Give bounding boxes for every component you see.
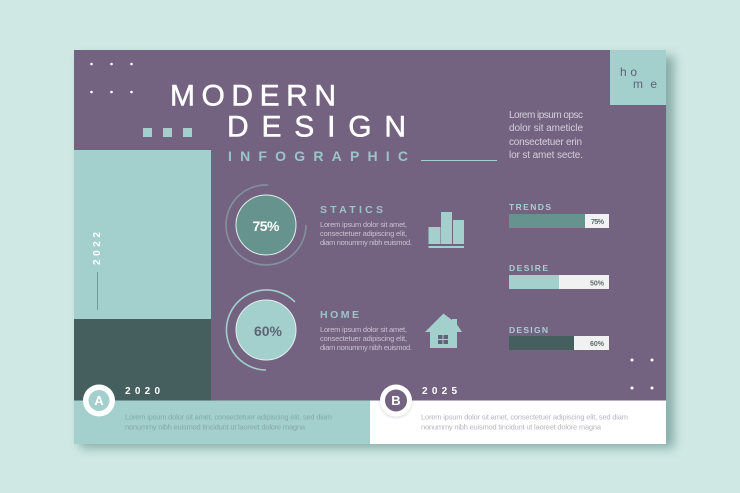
body: home: Lorem ipsum dolor sit amet, bbox=[320, 325, 407, 334]
year 2022 vertical: 2022 bbox=[92, 232, 103, 265]
decoration: three squares bbox=[143, 128, 192, 137]
badge B bbox=[380, 384, 412, 418]
intro text bbox=[509, 110, 583, 161]
footer text B bbox=[421, 412, 628, 432]
heading: home: HOME bbox=[320, 309, 359, 321]
panel: footer A bbox=[74, 400, 370, 444]
panel: footer B bbox=[370, 400, 666, 444]
panel: home tab bbox=[610, 50, 666, 105]
footer text A: nonummy nibh euismod tincidunt ut laoreet dolore magna bbox=[125, 422, 306, 432]
donut: 75% bbox=[226, 185, 306, 265]
intro text: dolor sit ameticle bbox=[509, 123, 583, 134]
decoration: top-left dots bbox=[90, 63, 133, 93]
label: desire: DESIRE bbox=[509, 263, 548, 273]
title line: modern: MODERN bbox=[170, 80, 336, 112]
body: home: consectetuer adipiscing elit, bbox=[320, 334, 407, 343]
panel: left light block bbox=[74, 150, 211, 319]
panel: left dark block bbox=[74, 319, 211, 401]
badge B: B bbox=[391, 393, 401, 408]
body: home: diam nonummy nibh euismod. bbox=[320, 343, 412, 352]
bar: trends bbox=[509, 202, 609, 228]
year 2025: 2025 bbox=[422, 386, 457, 397]
panel: purple card bbox=[74, 50, 666, 401]
body: statics: Lorem ipsum dolor sit amet, bbox=[320, 220, 407, 229]
badge A bbox=[83, 384, 115, 416]
heading: statics: STATICS bbox=[320, 204, 383, 216]
bar: design bbox=[509, 325, 609, 350]
body: statics: consectetuer adipiscing elit, bbox=[320, 229, 407, 238]
subtitle rule bbox=[421, 160, 497, 161]
icon: house bbox=[425, 314, 462, 348]
label: trends: TRENDS bbox=[509, 202, 551, 212]
body: statics bbox=[320, 220, 412, 247]
subtitle: INFOGRAPHIC bbox=[228, 148, 408, 164]
text: home bottom: m e bbox=[633, 77, 657, 91]
bar: desire bbox=[509, 263, 609, 289]
title bbox=[170, 80, 406, 144]
year 2020: 2020 bbox=[125, 386, 160, 397]
label: design: DESIGN bbox=[509, 325, 548, 335]
value: 50%: 50% bbox=[590, 280, 605, 288]
value: 75%: 75% bbox=[591, 219, 605, 226]
icon: bar chart bbox=[428, 212, 464, 248]
section: statics text bbox=[320, 204, 412, 247]
donut value 75: 75% bbox=[252, 218, 280, 234]
footer text B: nonummy nibh euismod tincidunt ut laoreet dolore magna bbox=[421, 422, 602, 432]
donut: 60% bbox=[226, 290, 296, 370]
section: home text bbox=[320, 309, 412, 352]
decoration: bottom-right dots bbox=[630, 358, 654, 390]
intro text: Lorem ipsum opsc bbox=[509, 110, 583, 121]
footer text B: Lorem ipsum dolor sit amet, consectetuer adipiscing elit, sed diam bbox=[421, 412, 628, 422]
title line: design: DESIGN bbox=[227, 110, 406, 144]
badge A: A bbox=[94, 393, 104, 408]
donut value 60: 60% bbox=[254, 323, 283, 339]
footer text A bbox=[125, 412, 332, 432]
text: home top: h o bbox=[620, 65, 637, 79]
value: 60%: 60% bbox=[590, 341, 605, 348]
body: statics: diam nonummy nibh euismod. bbox=[320, 238, 412, 247]
card shadow bbox=[80, 56, 674, 448]
footer text A: Lorem ipsum dolor sit amet, consectetuer adipiscing elit, sed diam bbox=[125, 412, 332, 422]
intro text: lor st amet secte. bbox=[509, 150, 583, 161]
body: home bbox=[320, 325, 412, 352]
year line bbox=[97, 272, 98, 310]
intro text: consectetuer erin bbox=[509, 137, 582, 148]
